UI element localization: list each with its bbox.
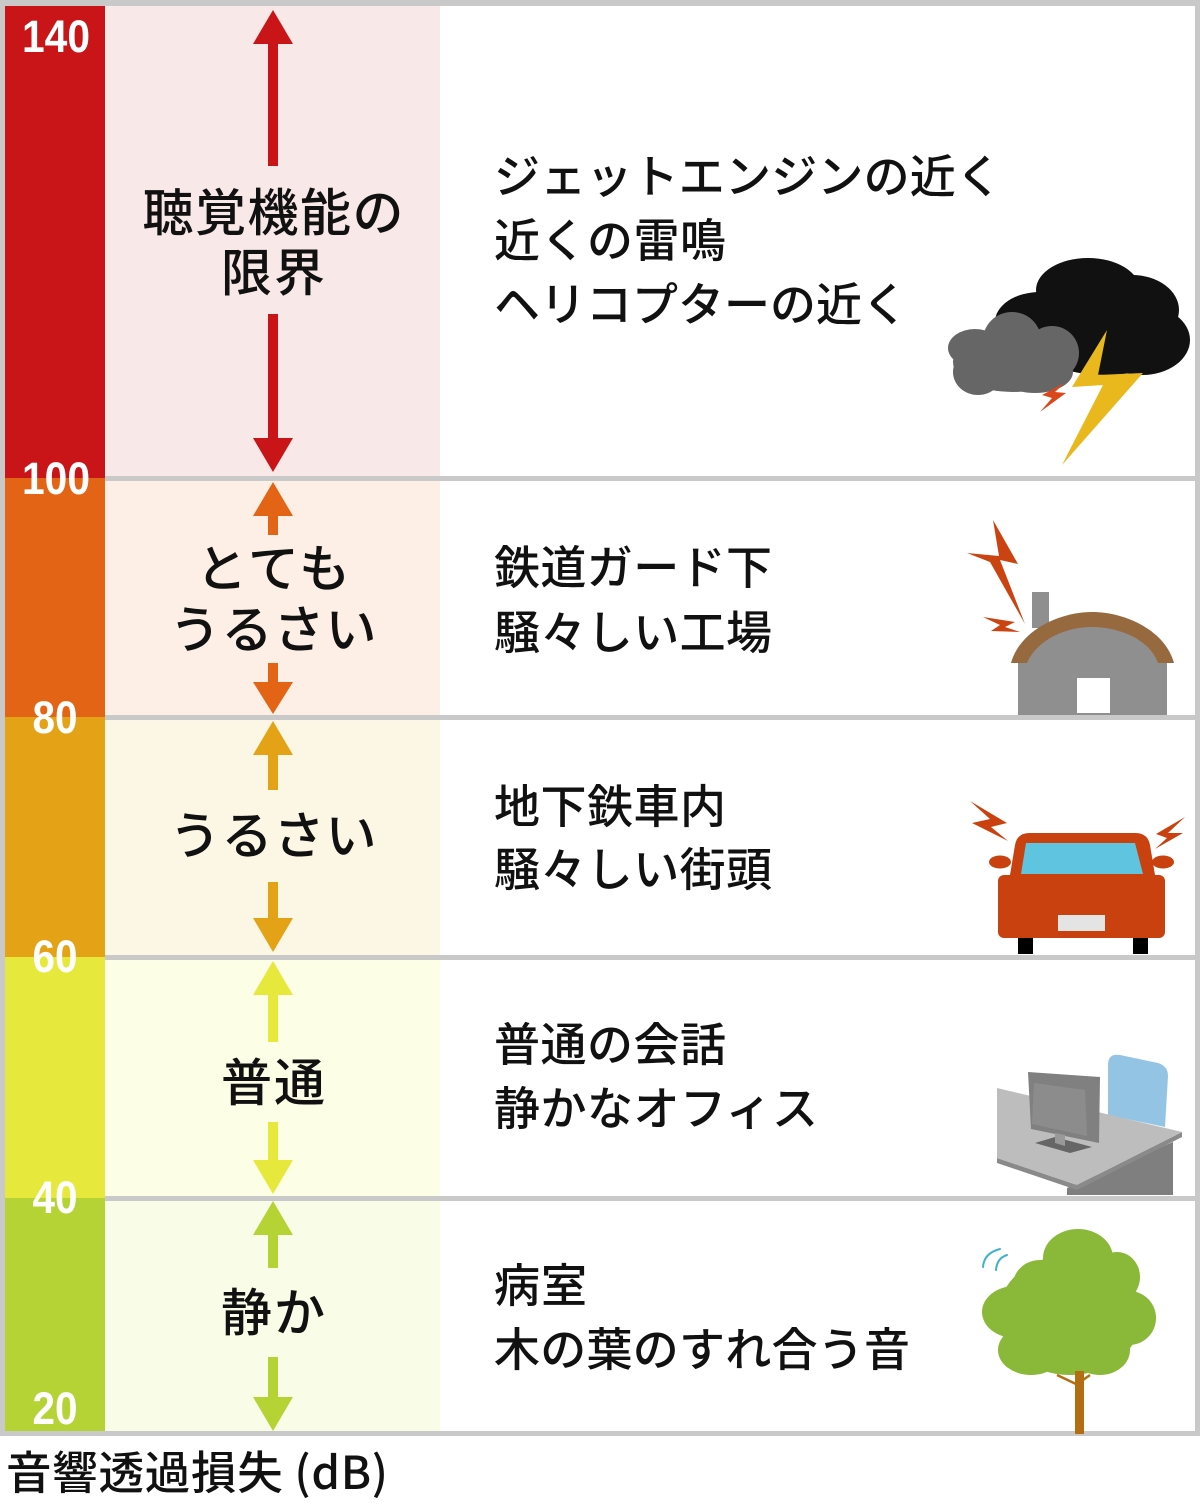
divider lines <box>105 476 1195 1201</box>
examples: jet engine, thunder, helicopter: 近くの雷鳴 <box>494 215 726 267</box>
decibel scale numbers: 40 <box>32 1172 78 1223</box>
label: loud: うるさい <box>170 808 376 865</box>
panel: 80-100 dB very loud <box>5 478 1174 717</box>
label: hearing limit <box>142 185 404 302</box>
arrow up: normal <box>253 961 293 1042</box>
arrow up: very loud <box>253 482 293 535</box>
label: very loud: うるさい <box>170 602 376 659</box>
decibel scale numbers: 60 <box>32 931 78 982</box>
arrow down: hearing limit <box>253 314 293 472</box>
arrow down: loud <box>253 882 293 952</box>
icon: office desk <box>997 1055 1182 1195</box>
examples: jet engine, thunder, helicopter: ヘリコプターの近く <box>494 279 908 331</box>
examples: subway car, noisy street: 地下鉄車内 <box>494 781 726 833</box>
examples: railway underpass, noisy factory: 鉄道ガード下 <box>494 542 772 594</box>
icon: tree <box>982 1229 1156 1434</box>
decibel scale numbers <box>22 11 90 1434</box>
decibel scale numbers: 140 <box>22 11 90 62</box>
examples: conversation, quiet office: 静かなオフィス <box>494 1083 818 1135</box>
examples: conversation, quiet office <box>494 1019 818 1135</box>
label: very loud <box>170 541 376 659</box>
examples: railway underpass, noisy factory: 騒々しい工場 <box>494 607 772 659</box>
arrow down: normal <box>253 1122 293 1194</box>
axis caption: 音響透過損失 (dB) <box>6 1437 388 1503</box>
decibel scale numbers: 20 <box>32 1383 78 1434</box>
icon: honking car <box>970 801 1185 954</box>
decibel scale numbers: 100 <box>22 453 90 504</box>
icon: thundercloud <box>948 258 1190 465</box>
arrow up: hearing limit <box>253 10 293 166</box>
examples: railway underpass, noisy factory <box>494 542 772 659</box>
panel: 60-80 dB loud <box>5 717 1185 957</box>
arrow down: quiet <box>253 1357 293 1431</box>
examples: hospital room, rustling leaves <box>494 1260 910 1376</box>
label: very loud: とても <box>196 541 350 598</box>
decibel scale numbers: 80 <box>32 692 78 743</box>
icon: noisy house <box>967 520 1174 715</box>
panel: 100-140 dB hearing limit <box>5 6 1190 478</box>
examples: hospital room, rustling leaves: 木の葉のすれ合う音 <box>494 1324 910 1376</box>
examples: subway car, noisy street <box>494 781 772 896</box>
arrow up: loud <box>253 721 293 790</box>
arrow down: very loud <box>253 663 293 714</box>
panel: 20-40 dB quiet <box>5 1198 1156 1434</box>
arrow up: quiet <box>253 1201 293 1268</box>
examples: conversation, quiet office: 普通の会話 <box>494 1019 726 1071</box>
label: quiet: 静か <box>221 1285 325 1342</box>
examples: hospital room, rustling leaves: 病室 <box>494 1260 587 1312</box>
label: normal: 普通 <box>221 1055 325 1112</box>
label: hearing limit: 限界 <box>221 245 325 302</box>
examples: jet engine, thunder, helicopter: ジェットエンジンの近く <box>494 151 1002 203</box>
panel: 40-60 dB normal <box>5 957 1182 1198</box>
examples: subway car, noisy street: 騒々しい街頭 <box>494 844 772 896</box>
label: hearing limit: 聴覚機能の <box>142 185 404 242</box>
examples: jet engine, thunder, helicopter <box>494 151 1002 331</box>
